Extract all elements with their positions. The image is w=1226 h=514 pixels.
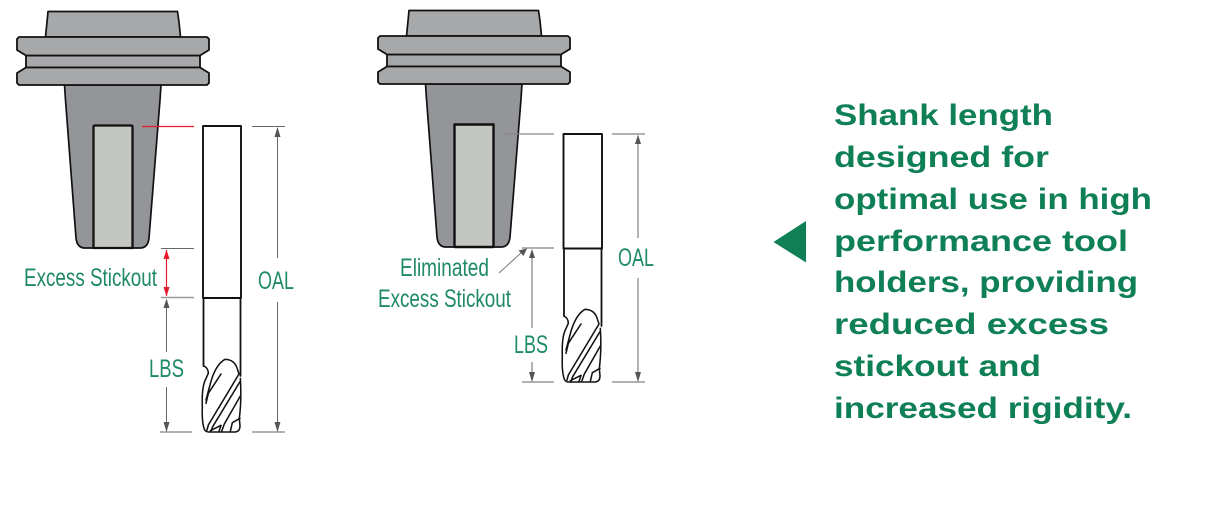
callout text: stickout and [834, 350, 1041, 383]
icon: pointer triangle [774, 221, 806, 262]
left dimension lines [142, 126, 285, 432]
right labels [378, 244, 654, 359]
right tool holder [378, 10, 570, 247]
label: LBS: LBS [149, 355, 184, 383]
OAL dimension [252, 126, 285, 432]
callout text: designed for [834, 141, 1049, 174]
LBS dimension [160, 298, 192, 432]
callout text: optimal use in high [834, 183, 1152, 216]
seat reference line [142, 126, 194, 128]
label: LBS: LBS [514, 331, 548, 359]
label: OAL: OAL [618, 244, 654, 272]
excess stickout dimension [161, 248, 194, 298]
right end mill [562, 134, 602, 382]
left end mill [202, 126, 241, 432]
callout text: holders, providing [834, 266, 1138, 299]
callout text: Shank length [834, 99, 1053, 132]
label: eliminated: Eliminated [400, 254, 489, 282]
left labels [24, 264, 294, 383]
arrow: eliminated stickout pointer [499, 248, 527, 273]
callout text: reduced excess [834, 308, 1109, 341]
label: excess stickout: Excess Stickout [24, 264, 157, 292]
callout text [834, 99, 1152, 425]
left tool holder [17, 12, 209, 248]
callout text: increased rigidity. [834, 392, 1132, 425]
right dimension lines [499, 134, 645, 382]
seat reference line [503, 133, 554, 135]
label: OAL: OAL [258, 267, 294, 295]
LBS dimension [522, 248, 554, 382]
callout text: performance tool [834, 225, 1128, 258]
OAL dimension [612, 134, 645, 382]
label: excess stickout: Excess Stickout [378, 285, 511, 313]
